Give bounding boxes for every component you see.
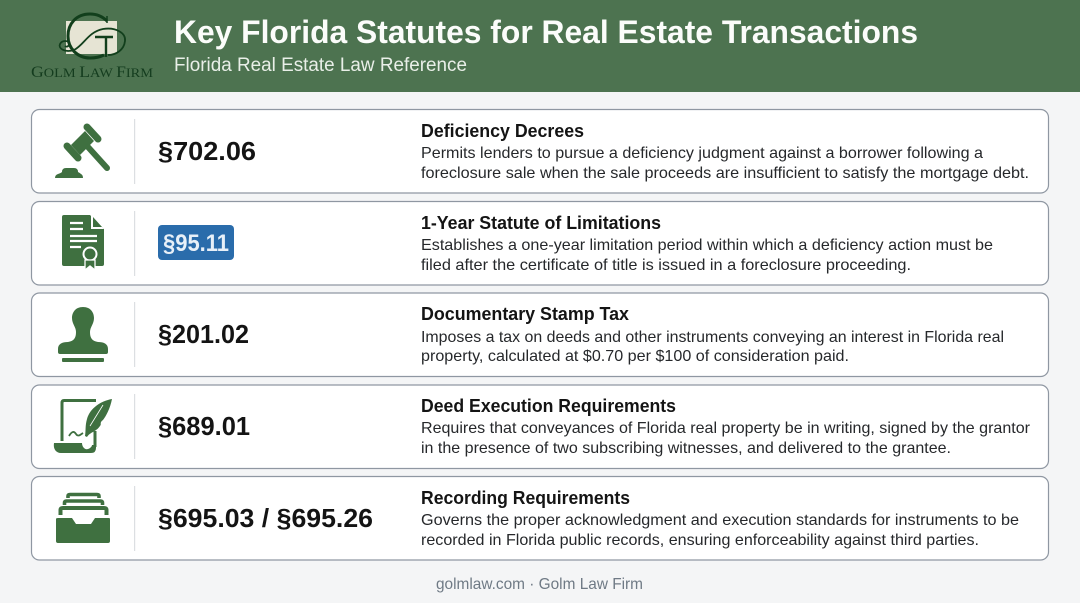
description block: foreclosure sale when the sale proceeds are insufficient to satisfy the mortgage debt.: [421, 165, 1029, 182]
section number: §695.03 / §695.26: [158, 503, 373, 533]
title: Key Florida Statutes for Real Estate Transactions: [174, 14, 918, 50]
description block: Deed Execution Requirements: [421, 396, 676, 416]
description block: Documentary Stamp Tax: [421, 304, 629, 324]
icon: deed and quill: [54, 399, 112, 453]
section number: §689.01: [158, 411, 250, 441]
section badge: §95.11: [163, 230, 229, 257]
icon: certificate document: [62, 215, 104, 270]
description block: [421, 304, 1004, 365]
description block: property, calculated at $0.70 per $100 of consideration paid.: [421, 348, 849, 365]
icon: file tray: [56, 494, 110, 543]
description block: filed after the certificate of title is issued in a foreclosure proceeding.: [421, 257, 911, 274]
section number: §702.06: [158, 136, 256, 166]
description block: in the presence of two subscribing witnesses, and delivered to the grantee.: [421, 440, 951, 457]
row: §95.11 1-Year Statute of Limitations: [32, 202, 1048, 285]
row: §702.06 Deficiency Decrees: [32, 110, 1048, 193]
icon: gavel: [55, 127, 107, 178]
subtitle: Florida Real Estate Law Reference: [174, 55, 467, 76]
description block: Recording Requirements: [421, 488, 630, 508]
description block: Requires that conveyances of Florida real property be in writing, signed by the grantor: [421, 420, 1031, 437]
section number: §201.02: [158, 319, 249, 349]
description block: [421, 213, 993, 274]
description block: 1-Year Statute of Limitations: [421, 213, 661, 233]
description block: Deficiency Decrees: [421, 121, 584, 141]
description block: [421, 396, 1031, 457]
row: §201.02 Documentary Stamp Tax: [32, 293, 1048, 376]
logo: Golm Law Firm: [31, 14, 153, 81]
description block: [421, 121, 1029, 182]
row: §689.01 Deed Execution Requirements: [32, 385, 1048, 468]
description block: Permits lenders to pursue a deficiency judgment against a borrower following a: [421, 145, 983, 162]
description block: Establishes a one-year limitation period within which a deficiency action must be: [421, 237, 993, 254]
header band: [0, 0, 1080, 92]
description block: Imposes a tax on deeds and other instruments conveying an interest in Florida real: [421, 329, 1004, 346]
description block: [421, 488, 1019, 549]
description block: Governs the proper acknowledgment and execution standards for instruments to be: [421, 512, 1019, 529]
logo: Golm Law Firm: GOLM LAW FIRM: [31, 64, 153, 81]
description block: recorded in Florida public records, ensuring enforceability against third parties.: [421, 532, 979, 549]
icon: stamp: [58, 307, 108, 362]
footer: golmlaw.com · Golm Law Firm: [436, 576, 643, 593]
row: §695.03 / §695.26 Recording Requirements: [32, 476, 1048, 560]
